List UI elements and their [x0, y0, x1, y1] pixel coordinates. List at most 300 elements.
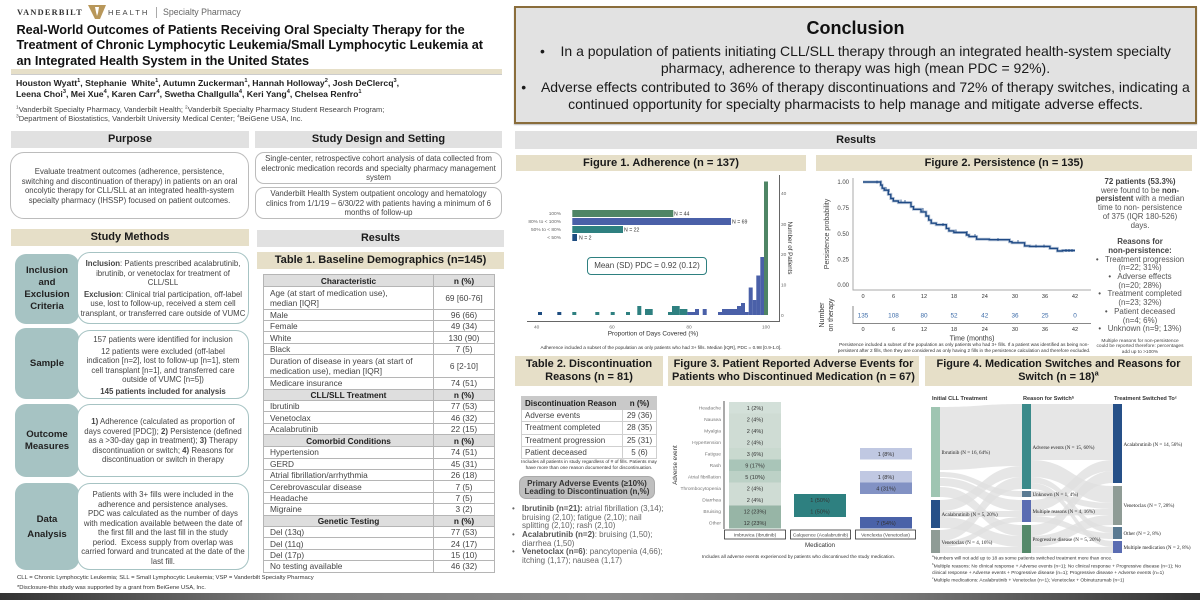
text: outcome measures	[77, 404, 249, 477]
heading: Table 1	[257, 252, 504, 269]
chart: medication switch Sankey diagram: Unknown (N = 1, 4%)	[1032, 491, 1079, 498]
text: sample: outside of VUMC [n=5]) 145 patients included for analysis	[100, 375, 226, 396]
text: itching (1,17); nausea (1,17)	[522, 556, 622, 565]
panel: study design	[255, 152, 502, 184]
chart: persistence Kaplan-Meier curve: 80	[920, 312, 928, 320]
panel: purpose text	[10, 152, 249, 219]
affiliations: 1Vanderbilt Specialty Pharmacy, Vanderbilt Health; 2Vanderbilt Specialty Pharmacy Student Research Program;	[16, 105, 384, 114]
heading: Figure 3: Patients who Discontinued Medication (n = 67)	[672, 371, 915, 383]
text: Acalabrutinib (n=2): bruising (1,50);	[522, 530, 652, 539]
chart: persistence Kaplan-Meier curve: 30	[1012, 327, 1018, 333]
chart: medication switch Sankey diagram: Venetoclax (N = 7, 28%)	[1124, 502, 1175, 509]
authors: Leena Choi3, Mei Xue4, Karen Carr4, Swetha Challgulla4, Keri Yang4, Chelsea Renfro1	[16, 89, 362, 99]
table: baseline demographics: Comorbid Conditions	[306, 436, 391, 446]
footnotes: figure 4: clinical response + Adverse events + Progressive disease (n=1); Progressive disease + Adverse events (n=1) c Multiple medications: Acalabrutinib + Venetoclax (n=1); Venetoclax + Obinutuzumab (n=1)	[932, 571, 1164, 583]
heading: Results (left)	[257, 230, 504, 247]
chart: persistence Kaplan-Meier curve: 52	[950, 312, 958, 320]
chart: adverse events heat table: Fatigue	[705, 452, 721, 458]
table: baseline demographics: Genetic Testing	[318, 516, 379, 526]
chart: medication switch Sankey diagram: Acalabrutinib (N = 14, 56%)	[1124, 441, 1183, 448]
panel: purpose text: switching and discontinuation of therapy) in patients on an oral	[22, 177, 237, 186]
chart: persistence Kaplan-Meier curve: 6	[892, 294, 895, 300]
chart: adherence histogram with inset bars: 60	[609, 324, 615, 330]
text: inclusion and exclusion criteria: use, lost to follow-up, received a stem cell	[90, 299, 236, 308]
logo: Vanderbilt Health Specialty Pharmacy: HEALTH	[108, 8, 149, 17]
chart: persistence Kaplan-Meier curve: 18	[951, 327, 957, 333]
text: outcome measures: discontinuation or switch in therapy	[102, 455, 224, 464]
heading: Results (right)	[515, 131, 1197, 149]
table: discontinuation reasons: Treatment progression	[525, 436, 605, 445]
table: baseline demographics: 7 (5)	[455, 482, 473, 492]
text: outcome measures: 1) Adherence (calculated as proportion of	[91, 417, 235, 426]
table: discontinuation reasons: n (%)	[630, 398, 649, 408]
chart: adherence histogram with inset bars: 40	[534, 324, 540, 330]
text: non-persistence summary: 72 patients (53.3%)	[1104, 177, 1176, 186]
panel: study setting: Vanderbilt Health System outpatient oncology and hematology	[270, 189, 487, 198]
affiliations	[16, 105, 384, 123]
table: discontinuation reasons: Patient deceased	[525, 448, 587, 457]
table: discontinuation reasons: Adverse events	[525, 411, 580, 420]
heading: Table 1: Table 1. Baseline Demographics (n=145)	[275, 254, 486, 266]
chart: adverse events heat table: Hypertension	[692, 440, 721, 446]
chart: adherence histogram with inset bars: 20	[781, 252, 787, 258]
affiliations: 3Department of Biostatistics, Vanderbilt University Medical Center; 4BeiGene USA, Inc.	[16, 114, 303, 123]
heading: Figure 1	[516, 155, 806, 171]
panel: study setting: months of follow-up	[344, 208, 412, 217]
text: •	[512, 530, 515, 539]
chart: persistence Kaplan-Meier curve: 135	[858, 312, 869, 320]
heading: Figure 4: Figure 4. Medication Switches and Reasons for	[937, 358, 1180, 370]
label: Sample: Sample	[30, 358, 64, 369]
text: data analysis: Patients with 3+ fills were included in the	[92, 490, 234, 499]
heading: Figure 2	[816, 155, 1192, 171]
chart: medication switch Sankey diagram: Other (N = 2, 8%)	[1124, 530, 1161, 537]
table: baseline demographics: 26 (18)	[451, 470, 477, 480]
chart: adherence histogram with inset bars: 100	[762, 324, 770, 330]
text: non-persistence summary: (n=4; 6%)	[1123, 316, 1157, 325]
chart: persistence Kaplan-Meier curve: 24	[982, 327, 988, 333]
chart: adherence histogram with inset bars: 0	[781, 313, 784, 319]
chart: medication switch Sankey diagram: Reason for Switch	[1023, 396, 1072, 402]
chart: adverse events heat table: 2 (4%)	[747, 429, 763, 435]
panel: conclusion: • In a population of patients initiating CLL/SLL therapy through an integrated health-system specialty	[540, 43, 1171, 59]
chart: persistence Kaplan-Meier curve: 0.50	[837, 232, 850, 238]
table: baseline demographics: Del (13q)	[270, 527, 304, 537]
text: outcome measures: as a >30-day gap in treatment); 3) Therapy	[88, 436, 238, 445]
text: data analysis: the first fill and the last fill in the study	[98, 528, 228, 537]
chart: adverse events heat table: 1 (50%)	[810, 498, 830, 504]
chart: adherence histogram with inset bars: N = 2	[579, 236, 592, 242]
heading: Study Methods: Study Methods	[91, 231, 169, 243]
text: non-persistence summary: • Patient deceased	[1105, 307, 1175, 316]
chart: medication switch Sankey diagram: Ibrutinib (N = 16, 64%)	[942, 449, 990, 456]
chart: persistence Kaplan-Meier curve: 42	[1072, 294, 1078, 300]
chart: adverse events heat table: Thrombocytopenia	[680, 486, 721, 492]
table: baseline demographics: 74 (51)	[451, 447, 477, 457]
chart: persistence Kaplan-Meier curve: 36	[1042, 294, 1048, 300]
table: baseline demographics: 46 (32)	[451, 561, 477, 571]
text: non-persistence summary: • Unknown (n=9; 13%)	[1098, 324, 1182, 333]
chart: adverse events heat table: 9 (17%)	[745, 464, 765, 470]
chart: adverse events heat table: Rash	[710, 463, 721, 469]
text: data analysis: PDC was calculated as the number of days	[88, 509, 238, 518]
footer bar	[0, 593, 1200, 600]
heading: Table 2: Table 2. Discontinuation	[526, 358, 652, 370]
text: non-persistence summary: time to non- persistence	[1098, 203, 1182, 212]
chart: adverse events heat table: 2 (4%)	[747, 498, 763, 504]
table: baseline demographics: 7 (5)	[455, 344, 473, 354]
text: sample: 157 patients were identified for inclusion 12 patients were excluded (off-label	[93, 335, 233, 356]
callout: primary adverse events: Leading to Discontinuation (n,%)	[525, 487, 649, 496]
chart: medication switch Sankey diagram: b	[1072, 396, 1074, 400]
table: baseline demographics: Medicare insurance	[270, 378, 342, 388]
table: baseline demographics: Migraine	[270, 504, 302, 514]
label: Sample	[15, 328, 79, 399]
chart: adverse events heat table: Bruising	[703, 509, 721, 515]
table: baseline demographics: Del (11q)	[270, 539, 304, 549]
chart: adherence histogram with inset bars: 80% to < 100%	[528, 219, 562, 225]
label: Outcome Measures	[15, 404, 79, 477]
text: Ibrutinib (n=21): atrial fibrillation (3,14);	[522, 504, 664, 513]
chart: medication switch Sankey diagram: Venetoclax (N = 4, 16%)	[942, 539, 993, 546]
table: baseline demographics: Venetoclax	[270, 413, 311, 423]
heading: Table 2: Reasons (n = 81)	[545, 371, 633, 383]
table: discontinuation reasons: 25 (31)	[627, 436, 652, 445]
table: baseline demographics: Duration of disease in years (at start of	[270, 356, 412, 366]
chart: adverse events heat table: 12 (23%)	[744, 510, 766, 516]
chart: adverse events heat table: 12 (23%)	[744, 521, 766, 527]
label: Inclusion and Exclusion Criteria: Inclusion	[26, 265, 68, 276]
label: Outcome Measures: Measures	[25, 440, 69, 452]
chart: persistence Kaplan-Meier curve: 1.00	[837, 180, 850, 186]
chart: persistence Kaplan-Meier curve: 0	[861, 294, 865, 300]
table: baseline demographics: Cerebrovascular disease	[270, 482, 362, 492]
authors	[16, 78, 399, 99]
chart: adherence histogram with inset bars: 40	[781, 191, 787, 197]
chart: persistence Kaplan-Meier curve: Persistence probability	[824, 198, 831, 269]
text: non-persistence summary: of 375 (IQR 180-526)	[1103, 212, 1177, 221]
panel: purpose text: oncolytic therapy for CLL/SLL at an integrated health-system	[25, 186, 234, 195]
chart: adverse events heat table: 2 (4%)	[747, 440, 763, 446]
label: Data Analysis: Data	[37, 514, 57, 524]
footnotes: abbreviations and disclosure: CLL = Chronic Lymphocytic Leukemia; SLL = Small Lymphocytic Leukemia; VSP = Vanderbilt Specialty Pharmacy	[17, 575, 314, 581]
text: data analysis: period. Excess supply from overlap was	[93, 538, 233, 547]
chart: persistence Kaplan-Meier curve: 18	[951, 294, 957, 300]
callout: primary adverse events: Primary Adverse Events (≥10%)	[527, 478, 647, 488]
table: baseline demographics: 22 (15)	[451, 424, 477, 434]
chart: persistence Kaplan-Meier curve: 0.75	[837, 206, 850, 212]
text: data analysis: adherence and persistence analyses.	[98, 500, 228, 509]
table: baseline demographics: medication use), median [IQR]	[270, 366, 382, 376]
text: outcome measures: discontinuation or switch; 4) Reasons for	[92, 446, 234, 455]
text: non-persistence summary: Multiple reasons for non-persistence	[1101, 339, 1179, 344]
heading: Study Design and Setting: Study Design and Setting	[312, 133, 445, 145]
table: baseline demographics: Acalabrutinib	[270, 424, 318, 434]
title underline	[11, 69, 502, 75]
text: sample	[77, 330, 249, 399]
chart: persistence Kaplan-Meier curve: Number	[819, 302, 826, 327]
chart: persistence Kaplan-Meier curve: 108	[888, 312, 899, 320]
table: baseline demographics: 45 (31)	[451, 459, 477, 469]
chart: persistence Kaplan-Meier curve: 36	[1042, 327, 1048, 333]
table: baseline demographics: Black	[270, 344, 290, 354]
panel: study design: Single-center, retrospective cohort analysis of data collected from	[265, 154, 492, 163]
table: baseline demographics: 77 (53)	[451, 527, 477, 537]
table: discontinuation reasons	[521, 396, 657, 459]
chart: adverse events heat table: 1 (2%)	[747, 406, 763, 412]
text: adverse event bullets	[512, 504, 664, 565]
text: non-persistence summary: were found to be non-	[1101, 186, 1179, 195]
title: Real-World Outcomes of Patients Receiving Oral Specialty Therapy for the	[16, 23, 465, 37]
table: baseline demographics: GERD	[270, 459, 294, 469]
chart: persistence Kaplan-Meier curve: 25	[1041, 312, 1049, 320]
text: splitting (2,10); rash (2,10)	[522, 521, 615, 530]
text: non-persistence summary	[1096, 177, 1184, 355]
table: baseline demographics	[263, 274, 495, 573]
label: Inclusion and Exclusion Criteria: Criteria	[30, 301, 64, 312]
table: baseline demographics: 49 (34)	[451, 321, 477, 331]
chart: medication switch Sankey diagram: Adverse events (N = 15, 60%)	[1032, 444, 1095, 451]
chart: persistence Kaplan-Meier curve: 6	[892, 327, 895, 333]
title: Treatment of Chronic Lymphocytic Leukemia/Small Lymphocytic Leukemia at	[16, 38, 483, 52]
chart: persistence Kaplan-Meier curve: 36	[1011, 312, 1019, 320]
table: baseline demographics: No testing available	[270, 561, 342, 571]
table: baseline demographics: 15 (10)	[451, 550, 477, 560]
heading: Table 2	[515, 356, 663, 386]
text: Venetoclax (n=6): pancytopenia (4,66);	[522, 547, 663, 556]
table: baseline demographics: 96 (66)	[451, 310, 477, 320]
text: inclusion and exclusion criteria: transplant, or transferred care outside of VUMC	[81, 308, 245, 318]
chart: persistence Kaplan-Meier curve: 30	[1012, 294, 1018, 300]
chart: adherence histogram with inset bars: N = 22	[624, 228, 640, 234]
chart: medication switch Sankey diagram: Treatment Switched To	[1114, 396, 1175, 402]
chart: adverse events heat table: 2 (4%)	[747, 418, 763, 424]
text: inclusion and exclusion criteria	[77, 252, 249, 324]
chart: medication switch Sankey diagram: Progressive disease (N = 5, 20%)	[1032, 536, 1101, 543]
chart: medication switch Sankey diagram: Acalabrutinib (N = 5, 20%)	[942, 511, 998, 518]
chart: adverse events heat table: 1 (8%)	[878, 475, 894, 481]
panel: purpose text: Evaluate treatment outcomes (adherence, persistence,	[35, 167, 224, 176]
text: data analysis: carried forward and truncated at the date of the	[81, 547, 245, 556]
chart: persistence Kaplan-Meier curve: 42	[1072, 327, 1078, 333]
chart: adverse events heat table: Adverse event	[672, 445, 679, 485]
text: inclusion and exclusion criteria: ibrutinib, or venetoclax for treatment of	[96, 268, 230, 278]
chart: adverse events heat table: Imbruvica (Ibrutinib)	[734, 532, 777, 538]
text: outcome measures: days covered [PDC]); 2) Persistence (defined	[84, 427, 242, 436]
heading: Results (left): Results	[361, 232, 400, 244]
chart: adverse events heat table: 5 (10%)	[745, 475, 765, 481]
note: figure 1: Adherence included a subset of the population as only patients who had 3+ fills. Median [IQR], PDC = 0.98 [0.9-1.0].	[540, 345, 782, 350]
chart: adverse events heat table: Medication	[805, 542, 836, 549]
chart: medication switch Sankey diagram: Multiple medication (N = 2, 8%)	[1124, 544, 1191, 551]
heading: Figure 4	[925, 356, 1192, 386]
table: discontinuation reasons: 28 (35)	[627, 423, 652, 432]
chart: adverse events heat table: Atrial fibrillation	[688, 474, 721, 480]
chart: persistence Kaplan-Meier curve: 0	[1073, 312, 1077, 320]
table: baseline demographics: CLL/SLL Treatment	[311, 390, 386, 400]
panel: study design: electronic medication records and specialty pharmacy management	[261, 164, 496, 173]
label: Inclusion and Exclusion Criteria: Exclusion	[24, 289, 70, 300]
text: data analysis	[77, 483, 249, 570]
text: data analysis: last fill.	[151, 557, 175, 566]
authors: Houston Wyatt1, Stephanie White1, Autumn Zuckerman1, Hannah Holloway2, Josh DeClercq3,	[16, 78, 399, 88]
text: sample: cell transplant [n=1], and transferred care	[91, 366, 235, 375]
table: baseline demographics: 69 [60-76]	[445, 293, 483, 303]
chart: persistence Kaplan-Meier curve: 12	[921, 294, 927, 300]
table: discontinuation reasons: Discontinuation Reason	[525, 398, 617, 408]
heading: Results (right): Results	[836, 134, 876, 146]
table: baseline demographics: White	[270, 333, 291, 343]
text: sample: indication [n=2], lost to follow-up [n=1], stem	[86, 356, 240, 365]
callout: mean PDC	[587, 257, 707, 275]
label: Outcome Measures: Outcome	[26, 428, 68, 440]
table: baseline demographics: Age (at start of medication use),	[270, 288, 388, 298]
chart: adverse events heat table: Nausea	[704, 417, 721, 423]
table: baseline demographics: n (%)	[454, 436, 474, 446]
heading: Figure 3	[668, 356, 919, 386]
chart: adherence histogram with inset bars: 100%	[549, 211, 562, 217]
heading: Study Design and Setting	[255, 131, 502, 148]
table: baseline demographics: Female	[270, 321, 298, 331]
chart: medication switch Sankey diagram: Initial CLL Treatment	[932, 396, 987, 402]
heading: Purpose	[11, 131, 249, 148]
panel: conclusion: continued opportunity for specialty pharmacists to help manage and mitigate adverse effects.	[568, 96, 1143, 112]
logo: Vanderbilt Health Specialty Pharmacy	[17, 5, 241, 19]
text: non-persistence summary: • Treatment completed	[1098, 289, 1182, 298]
text: non-persistence summary: (n=20; 28%)	[1118, 281, 1162, 290]
table: baseline demographics: Male	[270, 310, 288, 320]
table: discontinuation reasons: Treatment completed	[525, 423, 600, 432]
chart: adverse events heat table: 7 (54%)	[876, 521, 896, 527]
text: non-persistence summary: • Treatment progression	[1096, 255, 1184, 264]
note: figure 2	[838, 342, 1090, 353]
table: baseline demographics: 6 [2-10]	[450, 361, 478, 371]
chart: adherence histogram with inset bars: < 50%	[547, 235, 562, 241]
chart: adverse events heat table: Other	[709, 520, 721, 526]
table: baseline demographics: 7 (5)	[455, 493, 473, 503]
text: data analysis: with medication available between the date of	[84, 519, 242, 528]
chart: adherence histogram with inset bars: 10	[781, 282, 787, 288]
text: non-persistence summary: days. Reasons for	[1117, 221, 1163, 246]
table: baseline demographics: 77 (53)	[451, 401, 477, 411]
chart: persistence Kaplan-Meier curve: on therapy	[828, 298, 835, 332]
table: baseline demographics: n (%)	[454, 276, 474, 286]
table: baseline demographics: median [IQR]	[270, 298, 319, 308]
note: figure 3: Includes all adverse events experienced by patients who discontinued the study medication.	[702, 555, 895, 560]
chart: persistence Kaplan-Meier curve: 0.00	[837, 283, 850, 289]
text: non-persistence summary: non-persistence:	[1108, 246, 1172, 255]
footnotes: abbreviations and disclosure	[17, 575, 314, 590]
footnotes: figure 4: a Numbers will not add up to 18 as some patients switched treatment more than once. b Multiple reasons: No clinical response + Adverse events (n=1); No clinical response + Progressive disease (n=1); No	[932, 554, 1181, 569]
chart: adverse events heat table: 1 (8%)	[878, 452, 894, 458]
table: baseline demographics: 130 (90)	[449, 333, 479, 343]
table: baseline demographics: Ibrutinib	[270, 401, 300, 411]
chart: medication switch Sankey diagram: Multiple reasons (N = 4, 16%)	[1032, 508, 1095, 515]
label: Data Analysis	[15, 483, 79, 570]
note: figure 2: persistent after 2 fills, then they are considered as only having 2 fills in the persistence calculation and therefore excluded.	[838, 348, 1090, 353]
table: baseline demographics: Characteristic	[321, 276, 376, 286]
chart: adverse events heat table: 3 (6%)	[747, 452, 763, 458]
callout: primary adverse events	[519, 476, 655, 499]
panel: conclusion	[514, 6, 1197, 124]
table: baseline demographics: n (%)	[454, 390, 474, 400]
heading: Figure 2: Figure 2. Persistence (n = 135)	[925, 156, 1083, 168]
chart: adherence histogram with inset bars: 30	[781, 222, 787, 228]
note: figure 2: Persistence included a subset of the population as only patients who had 3+ fills. If a patient was identified as being non-	[839, 342, 1089, 347]
table: baseline demographics: n (%)	[454, 516, 474, 526]
text: diarrhea (1,50)	[522, 539, 574, 548]
chart: adherence histogram with inset bars: 80	[686, 324, 692, 330]
table: baseline demographics: Del (17p)	[270, 550, 304, 560]
chart: persistence Kaplan-Meier curve: 24	[982, 294, 988, 300]
text: non-persistence summary: persistent with a median	[1096, 194, 1184, 203]
text: bruising (2,10); fatigue (2,10); nail	[522, 513, 642, 522]
panel: purpose text: specialty pharmacy (IHSSP) focused on patient outcomes.	[29, 196, 230, 205]
label: Inclusion and Exclusion Criteria: and	[38, 277, 56, 288]
title	[16, 23, 483, 68]
heading: Figure 1: Figure 1. Adherence (n = 137)	[583, 156, 739, 168]
footnotes: abbreviations and disclosure: *Disclosure-this study was supported by a grant from BeiGene USA, Inc.	[17, 584, 206, 590]
panel: conclusion: pharmacy, adherence to therapy was high (mean PDC = 92%). • Adverse effects contributed to 36% of therapy discontinuations and 72% of therapy switches, indicating a	[521, 60, 1190, 95]
table: discontinuation reasons: 29 (36)	[627, 411, 652, 420]
table: baseline demographics: 24 (17)	[451, 539, 477, 549]
logo: Vanderbilt Health Specialty Pharmacy: VANDERBILT	[17, 8, 83, 17]
chart: adherence histogram with inset bars: N = 69	[732, 220, 748, 226]
heading: Figure 3: Figure 3. Patient Reported Adverse Events for	[674, 358, 913, 370]
text: non-persistence summary: could be reported therefore: percentages	[1097, 344, 1183, 349]
chart: persistence Kaplan-Meier curve: 12	[921, 327, 927, 333]
text: non-persistence summary: • Adverse effects	[1108, 272, 1172, 281]
text: inclusion and exclusion criteria: CLL/SLL Exclusion: Clinical trial participation, off-label	[84, 278, 242, 298]
text: non-persistence summary: add up to >100%	[1122, 350, 1158, 355]
heading: Figure 4: Switch (n = 18)a	[1018, 369, 1099, 383]
callout: mean PDC: Mean (SD) PDC = 0.92 (0.12)	[594, 261, 700, 270]
table: baseline demographics: 46 (32)	[451, 413, 477, 423]
text: non-persistence summary: (n=22; 31%)	[1118, 263, 1162, 272]
panel: study setting	[255, 187, 502, 219]
chart: adverse events heat table: Myalgia	[704, 428, 721, 434]
chart: persistence Kaplan-Meier curve: 42	[981, 312, 989, 320]
panel: study setting: clinics from 1/1/19 – 6/30/22 with patients having a minimum of 6	[266, 199, 491, 208]
chart: adherence histogram with inset bars: Number of Patients	[786, 222, 793, 274]
table: discontinuation reasons: 5 (6)	[631, 448, 648, 457]
text: •	[512, 504, 515, 513]
heading: Purpose: Purpose	[108, 133, 152, 145]
table: baseline demographics: Headache	[270, 493, 308, 503]
chart: adverse events heat table: 2 (4%)	[747, 486, 763, 492]
table: baseline demographics: Atrial fibrillation/arrhythmia	[270, 470, 368, 480]
table: baseline demographics: 74 (51)	[451, 378, 477, 388]
table: baseline demographics: Hypertension	[270, 447, 319, 457]
panel: study design: system	[366, 173, 391, 182]
label: Data Analysis: Analysis	[27, 528, 67, 540]
chart: adherence histogram with inset bars: N = 44	[674, 212, 690, 218]
text: non-persistence summary: (n=23; 32%)	[1118, 298, 1162, 307]
chart: adverse events heat table: 4 (31%)	[876, 486, 896, 492]
note: table 2: Includes all patients in study regardless of # of fills. Patients may	[521, 460, 657, 465]
chart: adverse events heat table: Calquence (Acalabrutinib)	[793, 532, 848, 538]
chart: adverse events heat table: Venclexta (Venetoclax)	[861, 532, 910, 538]
note: table 2	[521, 460, 657, 471]
note: table 2: have more than one reason documented for discontinuation.	[526, 466, 652, 471]
chart: adverse events heat table: Headache	[699, 406, 721, 412]
chart: adherence histogram with inset bars: Proportion of Days Covered (%)	[608, 330, 698, 338]
chart: adverse events heat table: 1 (50%)	[810, 510, 830, 516]
text: inclusion and exclusion criteria: Inclusion: Patients prescribed acalabrutinib,	[86, 259, 240, 268]
heading: Study Methods	[11, 229, 249, 246]
chart: adherence histogram with inset bars: 50% to < 80%	[531, 227, 562, 233]
title: an Integrated Health System in the United States	[16, 54, 309, 68]
